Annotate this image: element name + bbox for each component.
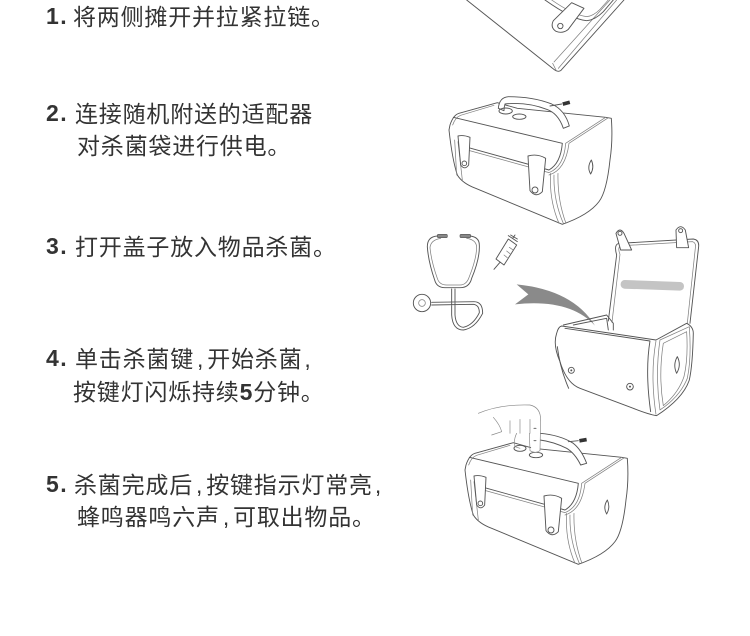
step 4 text: 4.: [46, 345, 68, 371]
lid label: [621, 280, 684, 291]
step 2 text: 连接随机附送的适配器: [75, 101, 313, 127]
arrow into bag: [515, 284, 595, 326]
right buckle: [528, 155, 546, 195]
body: [555, 323, 693, 416]
screws: [568, 367, 574, 373]
step 4 text: [46, 345, 325, 405]
step 5 text: [46, 471, 382, 530]
press button: [529, 452, 543, 458]
step 4 text: 按键灯闪烁持续5分钟。: [73, 379, 325, 405]
step 2 text: [46, 100, 313, 159]
front panel edge: [453, 117, 562, 170]
handle of bag in step 2: [498, 97, 570, 128]
hand: [478, 405, 541, 452]
left buckle: [458, 136, 470, 168]
side panel rims: [653, 327, 690, 414]
illustration: closed bag with hand (step 5): [465, 405, 628, 564]
step 2 text: 2.: [46, 100, 68, 126]
inside rim: [563, 315, 613, 330]
step 4 text: 单击杀菌键,开始杀菌,: [75, 346, 312, 372]
right buckle: [544, 495, 562, 535]
illustration: unfolded bag (step 1): [467, 0, 624, 71]
open lid: [608, 239, 699, 323]
step 1 text: 将两侧摊开并拉紧拉链。: [73, 4, 335, 30]
side button: [675, 357, 679, 373]
step 5 text: 蜂鸣器鸣六声,可取出物品。: [77, 504, 376, 530]
step 3 text: 3.: [46, 233, 68, 259]
illustration: stethoscope: [413, 234, 483, 330]
strap tab: [552, 3, 584, 32]
handle: [540, 433, 587, 465]
left buckle: [474, 476, 486, 508]
step 3 text: 打开盖子放入物品杀菌。: [75, 234, 337, 260]
step 5 text: 杀菌完成后,按键指示灯常亮,: [74, 472, 382, 498]
illustration: open bag (step 3): [555, 227, 699, 416]
step 2 text: 对杀菌袋进行供电。: [77, 133, 291, 159]
side button: [605, 500, 609, 514]
step 5 text: 5.: [46, 471, 68, 497]
illustration: syringe: [494, 235, 517, 269]
step 1 text: 1.: [46, 3, 68, 29]
bag body: [449, 103, 612, 224]
side button: [589, 160, 593, 174]
lid clasps: [616, 230, 632, 250]
illustration: closed bag with adapter (step 2): [449, 103, 612, 224]
bag body: [465, 443, 628, 564]
front panel edge: [469, 457, 578, 510]
